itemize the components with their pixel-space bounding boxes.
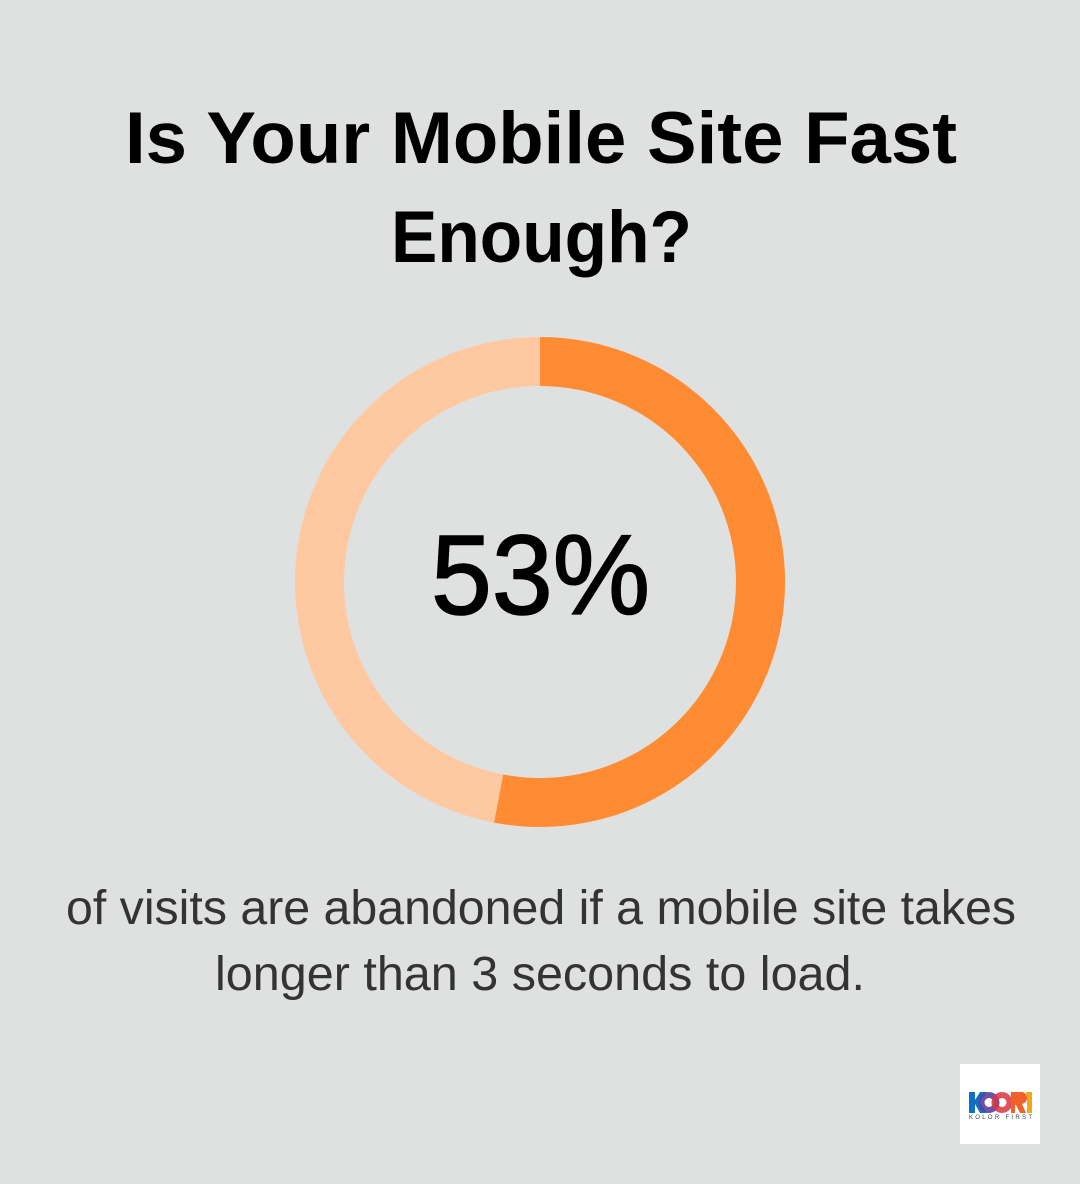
- description text: longer than 3 seconds to load.: [215, 948, 865, 1001]
- logo letter R: [1011, 1092, 1027, 1113]
- description text: [66, 882, 1016, 1001]
- logo tagline: KOLOR FIRST: [969, 1115, 1032, 1121]
- logo: Koor1 Kolor First: [960, 1064, 1040, 1144]
- logo letters O O: [982, 1095, 1010, 1110]
- statistic value: 53%: [431, 512, 650, 638]
- logo digit 1: [1026, 1092, 1032, 1113]
- description text: of visits are abandoned if a mobile site takes: [66, 882, 1016, 935]
- title: [125, 98, 957, 278]
- donut chart: 53%: [320, 362, 760, 803]
- title: Enough?: [391, 197, 692, 278]
- logo letter K: [969, 1092, 987, 1113]
- title: Is Your Mobile Site Fast: [125, 98, 957, 179]
